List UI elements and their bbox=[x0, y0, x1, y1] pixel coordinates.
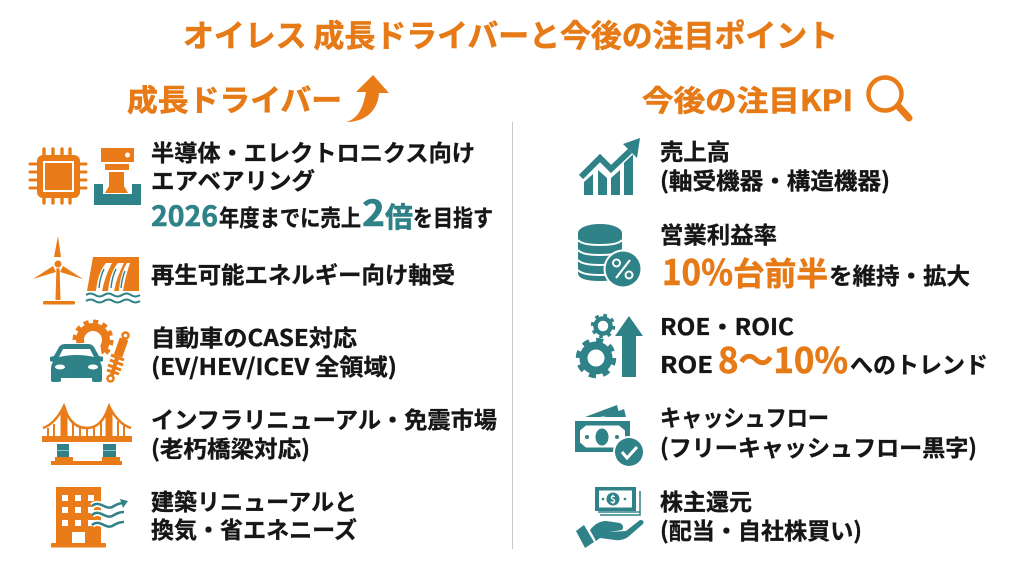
text: building renewal: 建築リニューアルと bbox=[151, 483, 357, 517]
text: revenue bbox=[660, 133, 890, 196]
text: building renewal bbox=[151, 483, 357, 545]
icon: hand holding money bbox=[576, 487, 644, 548]
text: infrastructure renewal: (老朽橋梁対応) bbox=[151, 430, 310, 464]
text: cash flow bbox=[660, 399, 977, 463]
icon: hydro dam bbox=[86, 257, 140, 302]
text: ROE and ROIC: ROE bbox=[660, 346, 713, 380]
text: ROE and ROIC: へのトレンド bbox=[850, 346, 988, 380]
icon: banknotes with check bbox=[575, 405, 645, 468]
text: semiconductor air bearing: 2 bbox=[362, 185, 385, 237]
icon: coins and percent bbox=[578, 224, 642, 288]
text: renewable energy bearings: 再生可能エネルギー向け軸受 bbox=[151, 256, 455, 290]
text: ROE and ROIC: ROE・ROIC bbox=[660, 308, 794, 342]
icon: hand holding money: $ bbox=[610, 491, 616, 506]
text: infrastructure renewal: インフラリニューアル・免震市場 bbox=[151, 401, 497, 435]
text: semiconductor air bearing: 半導体・エレクトロニクス向け bbox=[151, 134, 475, 168]
title: オイレス 成長ドライバーと今後の注目ポイント bbox=[183, 11, 838, 56]
text: semiconductor air bearing: 年度までに売上 bbox=[219, 199, 361, 233]
text: semiconductor air bearing: エアベアリング bbox=[151, 162, 315, 196]
text: ROE and ROIC: 8〜10% bbox=[718, 333, 848, 384]
text: automotive CASE bbox=[151, 319, 397, 382]
text: shareholder returns: 株主還元 bbox=[660, 483, 752, 517]
text: semiconductor air bearing bbox=[151, 134, 493, 237]
text: operating margin: 10% bbox=[662, 245, 733, 296]
icon: building with airflow bbox=[51, 487, 128, 548]
text: operating margin: 営業利益率 bbox=[660, 216, 777, 250]
heading: KPIs to watch: 今後の注目KPI bbox=[642, 78, 853, 120]
text: semiconductor air bearing: を目指す bbox=[413, 199, 493, 233]
icon: car, gear and shock absorber bbox=[50, 322, 128, 382]
icon: chip bbox=[30, 149, 86, 203]
icon: wind turbine bbox=[33, 236, 83, 304]
icon: magnifier bbox=[868, 78, 909, 118]
text: operating margin: を維持・拡大 bbox=[829, 257, 970, 291]
text: shareholder returns: (配当・自社株買い) bbox=[660, 512, 862, 546]
panel: KPIs to watch bbox=[575, 78, 988, 548]
text: automotive CASE: 自動車のCASE対応 bbox=[151, 319, 357, 353]
icon: bridge with seismic isolators bbox=[42, 404, 132, 465]
text: building renewal: 換気・省エネニーズ bbox=[151, 511, 357, 545]
panel: growth drivers bbox=[30, 75, 497, 548]
icon: rising bar chart bbox=[581, 138, 640, 195]
icon: up arrow bbox=[346, 75, 389, 122]
text: operating margin bbox=[660, 216, 970, 296]
heading: growth drivers: 成長ドライバー bbox=[127, 76, 342, 120]
text: shareholder returns bbox=[660, 483, 862, 546]
icon: gears and up arrow bbox=[578, 316, 643, 377]
text: automotive CASE: (EV/HEV/ICEV 全領域) bbox=[151, 348, 397, 382]
text: infrastructure renewal bbox=[151, 401, 497, 464]
text: cash flow: (フリーキャッシュフロー黒字) bbox=[660, 429, 977, 463]
text: operating margin: 台前半 bbox=[733, 249, 828, 295]
text: cash flow: キャッシュフロー bbox=[660, 399, 829, 433]
text: revenue: (軸受機器・構造機器) bbox=[660, 162, 890, 196]
text: revenue: 売上高 bbox=[660, 133, 730, 167]
text: semiconductor air bearing: 2026 bbox=[151, 195, 218, 235]
icon: air bearing press bbox=[94, 148, 141, 205]
text: ROE and ROIC bbox=[660, 308, 988, 384]
text: semiconductor air bearing: 倍 bbox=[385, 196, 413, 236]
